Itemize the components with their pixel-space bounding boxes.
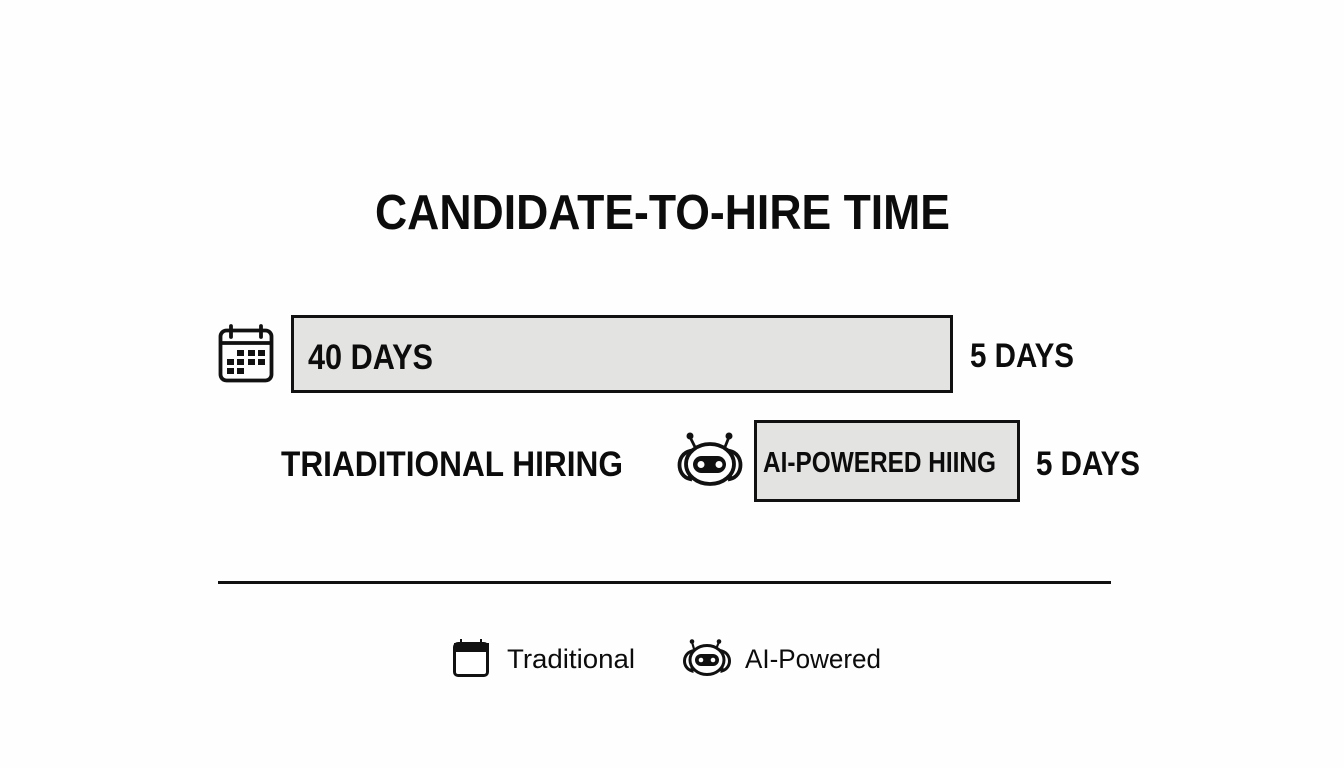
ai-powered bar bbox=[756, 422, 1018, 500]
bar label: 40 days: 40 DAYS bbox=[308, 338, 433, 377]
value: ai-powered 5 days: 5 DAYS bbox=[1036, 445, 1140, 483]
divider line bbox=[218, 581, 1111, 584]
legend icon: calendar bbox=[454, 639, 489, 676]
traditional bar bbox=[292, 316, 952, 392]
title: CANDIDATE-TO-HIRE TIME bbox=[375, 186, 950, 240]
icon: robot bbox=[680, 432, 740, 484]
legend text: traditional: Traditional bbox=[507, 644, 635, 674]
value: traditional 5 days: 5 DAYS bbox=[970, 337, 1074, 375]
bar label: ai-powered hiring: AI-POWERED HIING bbox=[763, 447, 996, 479]
legend icon: robot bbox=[684, 639, 730, 674]
label: traditional hiring: TRIADITIONAL HIRING bbox=[281, 445, 623, 484]
legend text: ai-powered: AI-Powered bbox=[745, 644, 881, 674]
icon: calendar bbox=[220, 326, 272, 380]
legend bbox=[454, 639, 881, 676]
